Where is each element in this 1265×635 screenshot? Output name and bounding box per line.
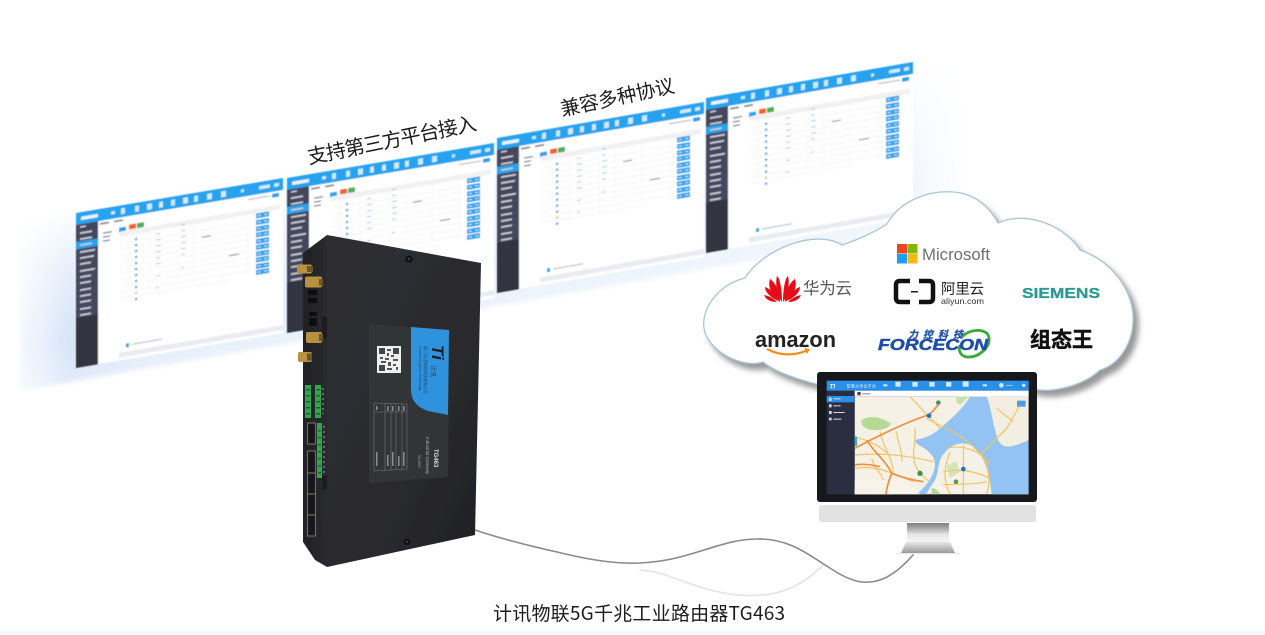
SIM and indicator slots [308, 290, 317, 326]
screen panel 2 [287, 143, 494, 333]
antenna connectors [297, 264, 323, 362]
monitor display with map: TI [829, 384, 835, 391]
monitor display with map [827, 381, 1029, 494]
product label: 厦门计讯物联科技有限公司 [423, 346, 429, 394]
device mounting flanges [322, 317, 329, 490]
monitor stand [896, 523, 960, 554]
blue brand panel [411, 327, 449, 415]
ethernet ports [308, 423, 316, 536]
terminal indicator pins [323, 388, 324, 476]
monitor display with map: 智慧水务云平台 [847, 382, 876, 388]
screen panel 4 [706, 62, 913, 253]
device front face [327, 235, 481, 567]
logo: Siemens: SIEMENS [1022, 285, 1100, 302]
caption: 计讯物联5G千兆工业路由器TG463 [493, 599, 785, 626]
logo: Aliyun: aliyun.com [941, 296, 984, 306]
model text: TG463 [432, 449, 438, 468]
heading: third-party platform access: 支持第三方平台接入 [305, 112, 479, 169]
logo: ForceCon: 力控科技 [908, 329, 965, 341]
logo: Amazon: amazon [755, 327, 836, 352]
monitor chin [819, 505, 1036, 522]
logo: Microsoft: Microsoft [922, 245, 990, 264]
logo: Zutai Wang: 组态王 [1030, 328, 1093, 352]
product label [369, 324, 449, 483]
specification table [374, 403, 407, 471]
mounting screws [404, 256, 412, 545]
cable to monitor [475, 530, 913, 596]
product label: 计讯 [429, 365, 437, 377]
product label: Industrial Gateway [425, 437, 430, 475]
bottom strip [0, 631, 1265, 635]
logo: Huawei Cloud [764, 276, 852, 302]
rotated brand logo: Ti [428, 345, 447, 361]
product label: Xiamen Tongxun Technology [418, 346, 422, 391]
monitor bezel [817, 372, 1037, 502]
screen panel 3 [497, 102, 704, 293]
QR code [377, 346, 401, 373]
monitor [817, 372, 1037, 554]
logo: ForceCon [878, 329, 989, 357]
logo: Microsoft [897, 244, 990, 264]
cloud [704, 192, 1133, 390]
screen panel 1 [76, 178, 283, 368]
logo: Aliyun: 阿里云 [941, 281, 984, 298]
device side panel [303, 235, 327, 567]
green terminal blocks [305, 385, 322, 478]
background glow behind screens [21, 117, 932, 388]
logo: Aliyun [896, 281, 984, 306]
logo: ForceCon: FORCECON [878, 337, 989, 354]
router device [297, 235, 481, 567]
heading: multi protocol compatibility: 兼容多种协议 [558, 75, 677, 121]
logo: Huawei Cloud: 华为云 [803, 279, 852, 298]
product label: 5G WiFi [417, 455, 421, 468]
